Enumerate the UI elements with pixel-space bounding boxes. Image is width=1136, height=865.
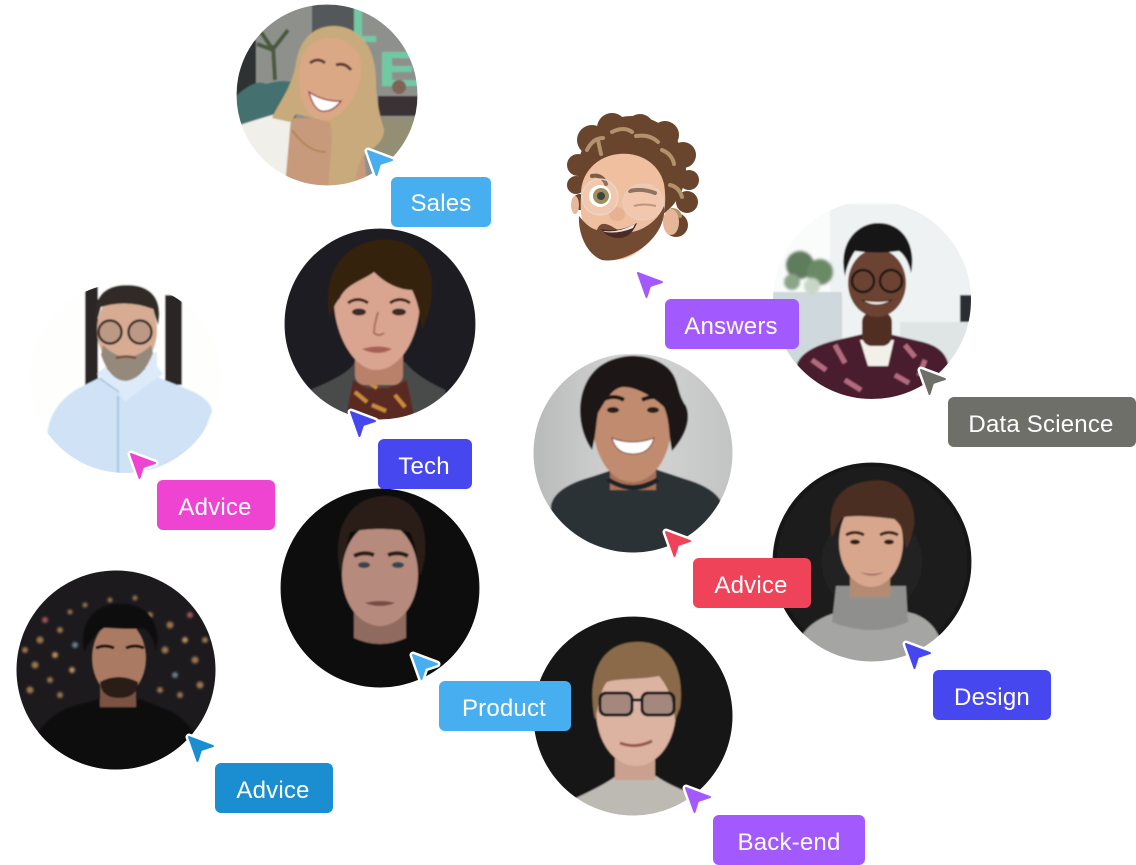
portrait: data science man	[772, 204, 972, 404]
cursor: design	[906, 644, 930, 668]
label: Tech	[378, 439, 472, 489]
cursor: data science	[921, 370, 945, 394]
label: Advice blue: Advice	[236, 777, 310, 804]
label: Tech: Tech	[398, 453, 450, 480]
label: Data Science: Data Science	[968, 411, 1114, 438]
cursor: tech	[351, 412, 375, 436]
label: Back-end: Back-end	[738, 829, 840, 856]
portrait: red advice man	[532, 354, 734, 560]
cursor: product	[413, 655, 437, 679]
portrait: sales woman	[236, 4, 418, 188]
label: Product: Product	[462, 695, 546, 722]
cursor: answers	[638, 273, 662, 297]
portrait: pink advice man	[47, 284, 212, 473]
portrait: tech man	[284, 228, 476, 420]
label: Advice red: Advice	[714, 572, 788, 599]
portrait: back-end man	[532, 616, 734, 818]
label: Sales	[391, 177, 491, 227]
portrait: product man	[280, 488, 480, 690]
label: Advice pink	[157, 480, 275, 530]
cursor: advice pink	[131, 454, 155, 478]
cursor: advice red	[666, 532, 690, 556]
portrait: memoji avatar	[567, 113, 699, 260]
label: Data Science	[948, 397, 1136, 447]
cursor: advice blue	[189, 737, 213, 761]
label: Back-end	[713, 815, 865, 865]
label: Advice blue	[215, 763, 333, 813]
label: Design: Design	[954, 684, 1030, 711]
label: Advice red	[693, 558, 811, 608]
label: Design	[933, 670, 1051, 720]
label: Answers	[665, 299, 799, 349]
cursor: sales	[368, 151, 392, 175]
label: Advice pink: Advice	[178, 494, 252, 521]
cursor: back-end	[686, 788, 710, 812]
label: Product	[439, 681, 571, 731]
label: Answers: Answers	[684, 313, 778, 340]
label: Sales: Sales	[410, 190, 472, 217]
portrait: design man	[772, 462, 972, 667]
portrait: blue advice man	[16, 570, 216, 775]
